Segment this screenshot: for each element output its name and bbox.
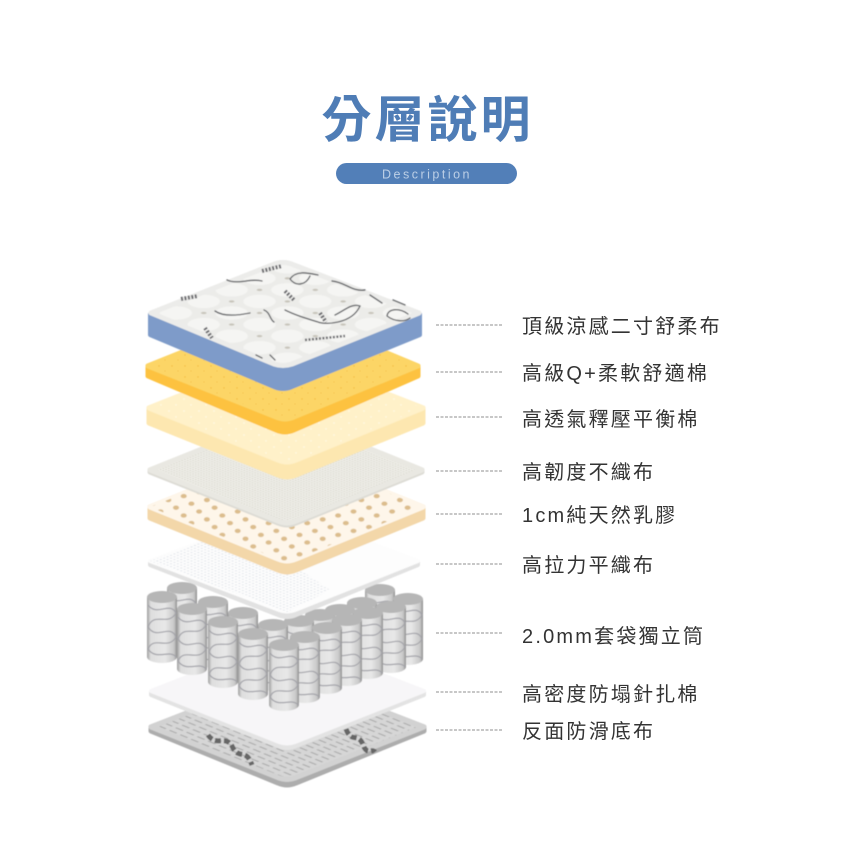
layer: breathable balance foam: [149, 354, 423, 477]
exploded mattress diagram: [147, 262, 424, 785]
layer: high-strength non-woven: [150, 415, 422, 525]
layer: needle-punched cotton pad: [151, 638, 424, 748]
layer: anti-slip bottom fabric: [151, 674, 424, 785]
connector lines: [436, 325, 502, 730]
label 1: 頂級涼感二寸舒柔布: [522, 315, 722, 338]
description pill: Description: [382, 168, 472, 182]
layer: natural latex: [150, 452, 423, 572]
layer: high-tension flat knit: [150, 511, 418, 617]
label 7: 2.0mm套袋獨立筒: [522, 625, 705, 648]
description pill: [336, 163, 517, 184]
label 6: 高拉力平織布: [522, 554, 655, 577]
label 3: 高透氣釋壓平衡棉: [522, 408, 700, 431]
label 2: 高級Q+柔軟舒適棉: [522, 362, 709, 385]
label 5: 1cm純天然乳膠: [522, 504, 677, 527]
layer labels: [522, 315, 722, 743]
label 4: 高韌度不織布: [522, 461, 655, 484]
label 8: 高密度防塌針扎棉: [522, 683, 700, 706]
layer: pocket springs: [147, 582, 423, 711]
layer: Q+ soft comfort foam: [148, 311, 418, 432]
label 9: 反面防滑底布: [522, 720, 655, 743]
layer: premium cool-touch fabric: [150, 262, 420, 389]
title: 分層說明: [322, 92, 534, 148]
